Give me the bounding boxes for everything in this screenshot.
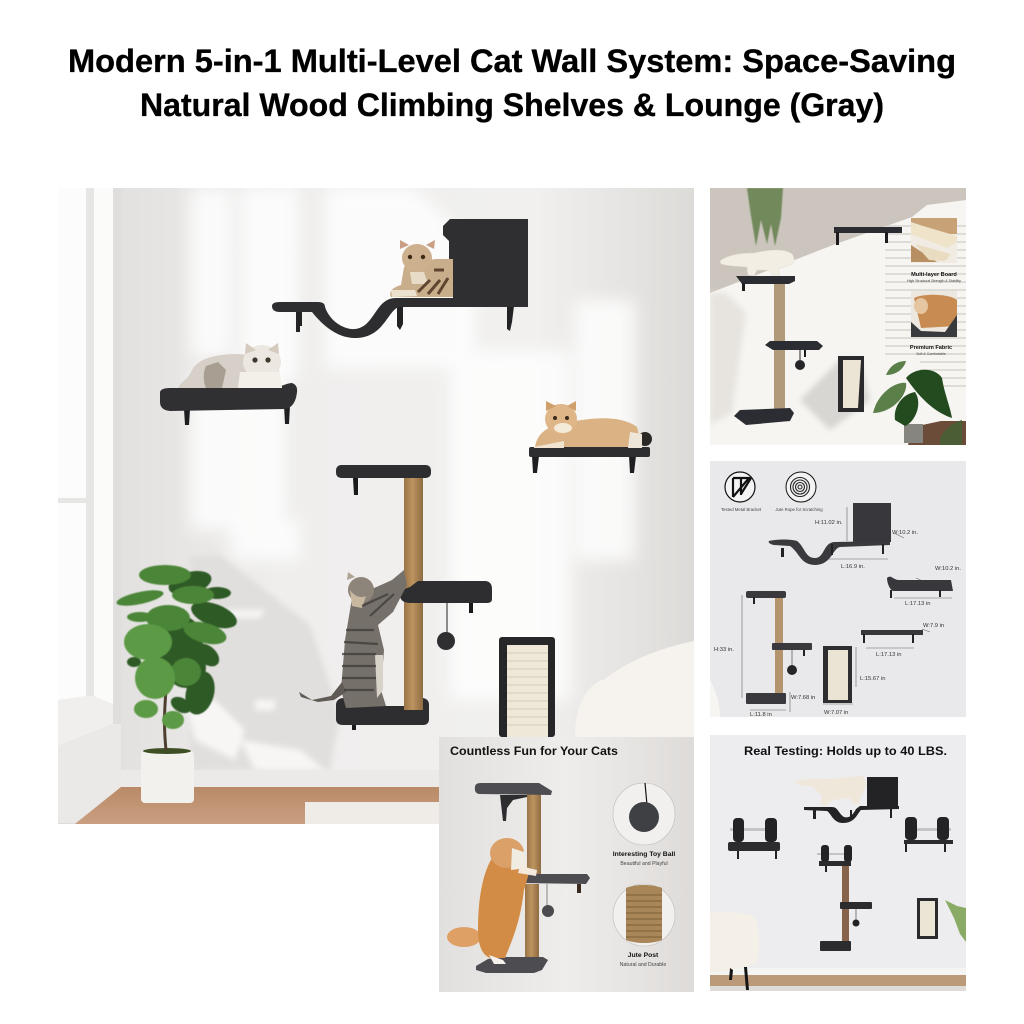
plant shadow on wall bbox=[190, 555, 340, 770]
dimension lines bbox=[742, 507, 952, 712]
floor bbox=[710, 968, 966, 991]
tower bbox=[475, 783, 590, 973]
cat tower bbox=[336, 465, 492, 730]
dimension labels: W:7.68 in bbox=[791, 695, 815, 701]
title bbox=[68, 43, 956, 123]
dimension labels: W:10.2 in. bbox=[935, 566, 961, 572]
panel: countless fun bbox=[439, 737, 694, 992]
white cat bbox=[720, 250, 794, 276]
label: toy ball: Beautiful and Playful bbox=[620, 861, 668, 867]
shelf top right bbox=[834, 227, 902, 245]
label: premium fabric: Soft & Comfortable bbox=[916, 352, 946, 356]
inset: premium fabric bbox=[911, 291, 957, 337]
dimension labels: H:33 in. bbox=[714, 647, 734, 653]
cat: orange fluffy bbox=[447, 838, 537, 964]
panel: main room scene bbox=[58, 188, 694, 824]
cat: tabby climbing tower bbox=[299, 570, 407, 708]
label: jute post: Jute Post bbox=[628, 952, 659, 959]
icon: metal bracket bbox=[725, 472, 755, 502]
shelf with cube bbox=[769, 503, 891, 565]
monstera plant bbox=[873, 361, 962, 445]
armchair bbox=[710, 912, 759, 990]
dimension labels: W:10.2 in. bbox=[892, 530, 918, 536]
label: premium fabric: Premium Fabric bbox=[910, 345, 952, 351]
panel: multi-layer board and premium fabric bbox=[710, 188, 966, 445]
tower with dumbbell bbox=[817, 845, 872, 951]
plant bbox=[945, 900, 966, 942]
dimension labels: L:17.13 in bbox=[876, 652, 901, 658]
label: multi-layer board bbox=[907, 272, 961, 283]
scratch pad bbox=[838, 356, 864, 412]
title: Natural Wood Climbing Shelves & Lounge (Gray) bbox=[140, 87, 884, 123]
white cat bbox=[795, 776, 866, 806]
label: toy ball bbox=[613, 851, 675, 867]
floor bbox=[908, 421, 966, 445]
label: multi-layer board: High Structural Strength & Stability bbox=[907, 279, 961, 283]
dimension labels: L:15.67 in bbox=[860, 676, 885, 682]
cat: cream tabby on top shelf bbox=[390, 240, 453, 297]
shelf: top wave shelf with cube bbox=[272, 219, 528, 338]
shelf: right narrow bbox=[529, 447, 650, 473]
shelf with cube bbox=[804, 777, 899, 823]
window blinds bbox=[885, 226, 966, 386]
dumbbell on right shelf bbox=[904, 817, 953, 852]
dimension labels: L:11.8 in bbox=[750, 712, 772, 718]
dumbbell on left shelf bbox=[728, 818, 780, 859]
icon: jute rope bbox=[786, 472, 816, 502]
label: jute post: Natural and Durable bbox=[620, 962, 666, 968]
scratch pad bbox=[823, 646, 852, 703]
callout: jute post bbox=[613, 884, 675, 946]
scratch pad bbox=[499, 637, 555, 737]
scratch pad bbox=[917, 898, 938, 939]
sofa bbox=[575, 641, 694, 737]
icon labels bbox=[721, 508, 822, 512]
inset: multi-layer board bbox=[911, 218, 957, 263]
icon labels: Tested Metal Bracket bbox=[721, 507, 762, 512]
window bbox=[58, 188, 121, 823]
callout: toy ball bbox=[613, 783, 675, 845]
dimension labels: L:16.9 in. bbox=[841, 564, 865, 570]
heading: Countless Fun for Your Cats bbox=[450, 744, 618, 758]
label: multi-layer board: Multi-layer Board bbox=[911, 272, 957, 278]
icon labels: Jute Rope for Scratching bbox=[775, 507, 823, 512]
dimension labels: W:7.07 in bbox=[824, 710, 848, 716]
cat: orange on right shelf bbox=[534, 401, 652, 448]
heading: Real Testing: Holds up to 40 LBS. bbox=[744, 744, 947, 758]
shelf: left lounge bbox=[160, 383, 297, 425]
tower bbox=[746, 591, 812, 704]
dimension labels: W:7.9 in bbox=[923, 623, 944, 629]
panel: dimensions bbox=[710, 461, 966, 718]
baseboard and floor bbox=[75, 770, 439, 824]
narrow shelf bbox=[861, 630, 923, 643]
label: jute post bbox=[620, 952, 666, 968]
potted plant bbox=[115, 565, 240, 803]
panel: real testing bbox=[710, 735, 966, 991]
label: premium fabric bbox=[910, 345, 952, 356]
dimension labels bbox=[714, 520, 961, 718]
hanging plant bbox=[747, 188, 783, 246]
title: Modern 5-in-1 Multi-Level Cat Wall System: Space-Saving bbox=[68, 43, 956, 79]
climbing post bbox=[734, 276, 823, 425]
label: toy ball: Interesting Toy Ball bbox=[613, 851, 675, 858]
cat: white and grey on left shelf bbox=[178, 343, 282, 388]
lounge shelf bbox=[887, 577, 953, 598]
dimension labels: H:11.02 in. bbox=[815, 520, 843, 526]
dimension labels: L:17.13 in bbox=[905, 601, 930, 607]
